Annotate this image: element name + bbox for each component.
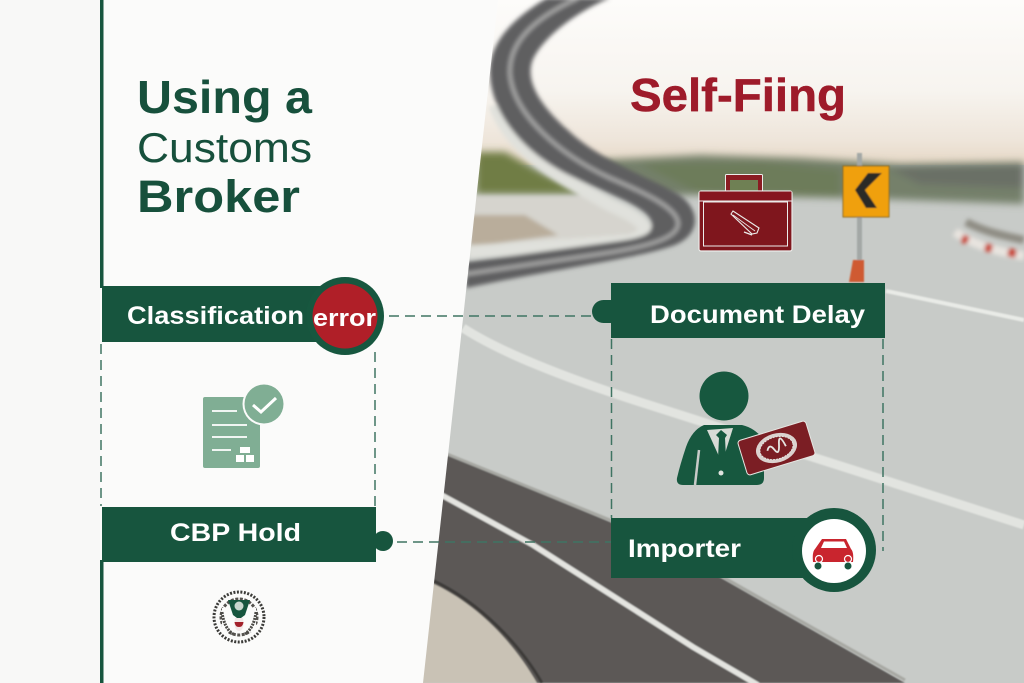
label: CBP Hold: CBP Hold — [170, 519, 301, 547]
label: CBP Hold — [102, 507, 393, 562]
icon: round seal — [214, 592, 264, 642]
label: Document Delay: Document Delay — [650, 301, 865, 329]
icon: red briefcase — [699, 174, 792, 251]
label: Document Delay — [592, 283, 885, 338]
label: Importer: Importer — [628, 535, 741, 563]
icon: red car — [813, 539, 853, 570]
label: Importer — [611, 508, 876, 592]
heading: Using a Customs Broker: Broker — [137, 171, 300, 222]
label: Classification error — [102, 277, 384, 355]
heading: Using a Customs Broker: Customs — [137, 124, 312, 171]
icon: document with check — [203, 382, 286, 468]
heading: Self-Filing side: Self-Fiing — [630, 69, 846, 121]
dashed connectors — [101, 316, 883, 551]
icon: importer person with badge — [677, 372, 816, 485]
left white panel — [0, 0, 498, 683]
label: Classification error: error — [313, 305, 376, 332]
heading: Using a Customs Broker — [137, 71, 312, 222]
heading: Using a Customs Broker: Using a — [137, 71, 312, 123]
label: Classification error: Classification — [127, 302, 304, 330]
